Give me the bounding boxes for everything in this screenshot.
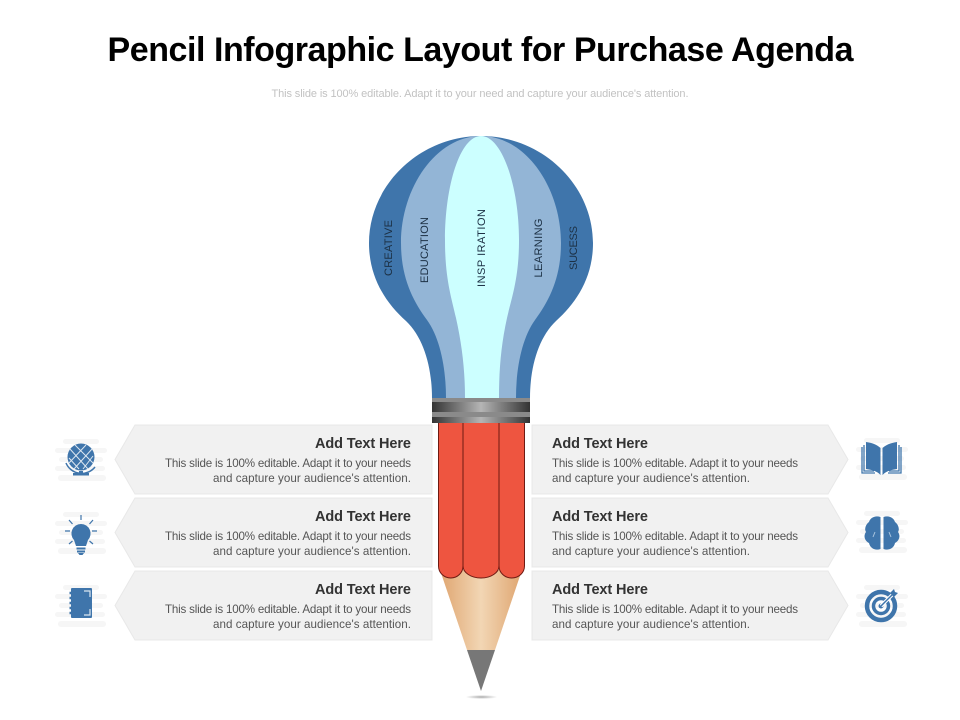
pencil wood [440,570,522,650]
left 3 heading: Add Text Here [315,582,411,598]
right 2 text: This slide is 100% editable. Adapt it to your needs [552,530,798,543]
panel: left text boxes [115,425,432,640]
bulb outer band [369,136,593,398]
bulb label: inspiration: INSP IRATION [476,209,488,287]
icon: target [856,585,908,627]
panel: right 3 [532,571,848,640]
icon: open book [856,438,908,480]
panel: left 3 [115,571,432,640]
icon: light bulb [55,512,107,555]
bulb inner band [445,136,519,398]
left 1 text: This slide is 100% editable. Adapt it to your needs [165,457,411,470]
light bulb [369,136,593,398]
right 2 heading: Add Text Here [552,509,648,525]
right 1 text: and capture your audience's attention. [552,472,750,485]
left 1 heading: Add Text Here [315,436,411,452]
bulb middle band [401,136,561,398]
right 3 text: This slide is 100% editable. Adapt it to your needs [552,603,798,616]
bulb label: creative: CREATIVE [383,220,395,276]
pencil lead [467,650,495,691]
icon: globe [55,439,107,481]
bulb label: learning: LEARNING [533,218,545,278]
subtitle: This slide is 100% editable. Adapt it to your need and capture your audience's attention. [272,88,688,100]
right 3 text: and capture your audience's attention. [552,618,750,631]
right 2 text: and capture your audience's attention. [552,545,750,558]
right 1 heading: Add Text Here [552,436,648,452]
right 3 heading: Add Text Here [552,582,648,598]
panel: left 2 [115,498,432,567]
pencil shadow [466,695,498,699]
icon: brain [856,511,908,553]
left 3 text: and capture your audience's attention. [213,618,411,631]
icon: notebook [55,585,107,627]
panel: right 2 [532,498,848,567]
left 1 text: and capture your audience's attention. [213,472,411,485]
left 3 text: This slide is 100% editable. Adapt it to your needs [165,603,411,616]
left 2 text: This slide is 100% editable. Adapt it to your needs [165,530,411,543]
right 1 text: This slide is 100% editable. Adapt it to your needs [552,457,798,470]
pencil body [438,422,524,578]
bulb label: education: EDUCATION [419,217,431,283]
panel: right text boxes [532,425,848,640]
left 2 text: and capture your audience's attention. [213,545,411,558]
pencil [432,398,530,699]
panel: right 1 [532,425,848,494]
left 2 heading: Add Text Here [315,509,411,525]
bulb label: sucess: SUCESS [568,226,580,270]
pencil collar [432,398,530,423]
panel: left 1 [115,425,432,494]
title: Pencil Infographic Layout for Purchase Agenda [108,31,855,69]
